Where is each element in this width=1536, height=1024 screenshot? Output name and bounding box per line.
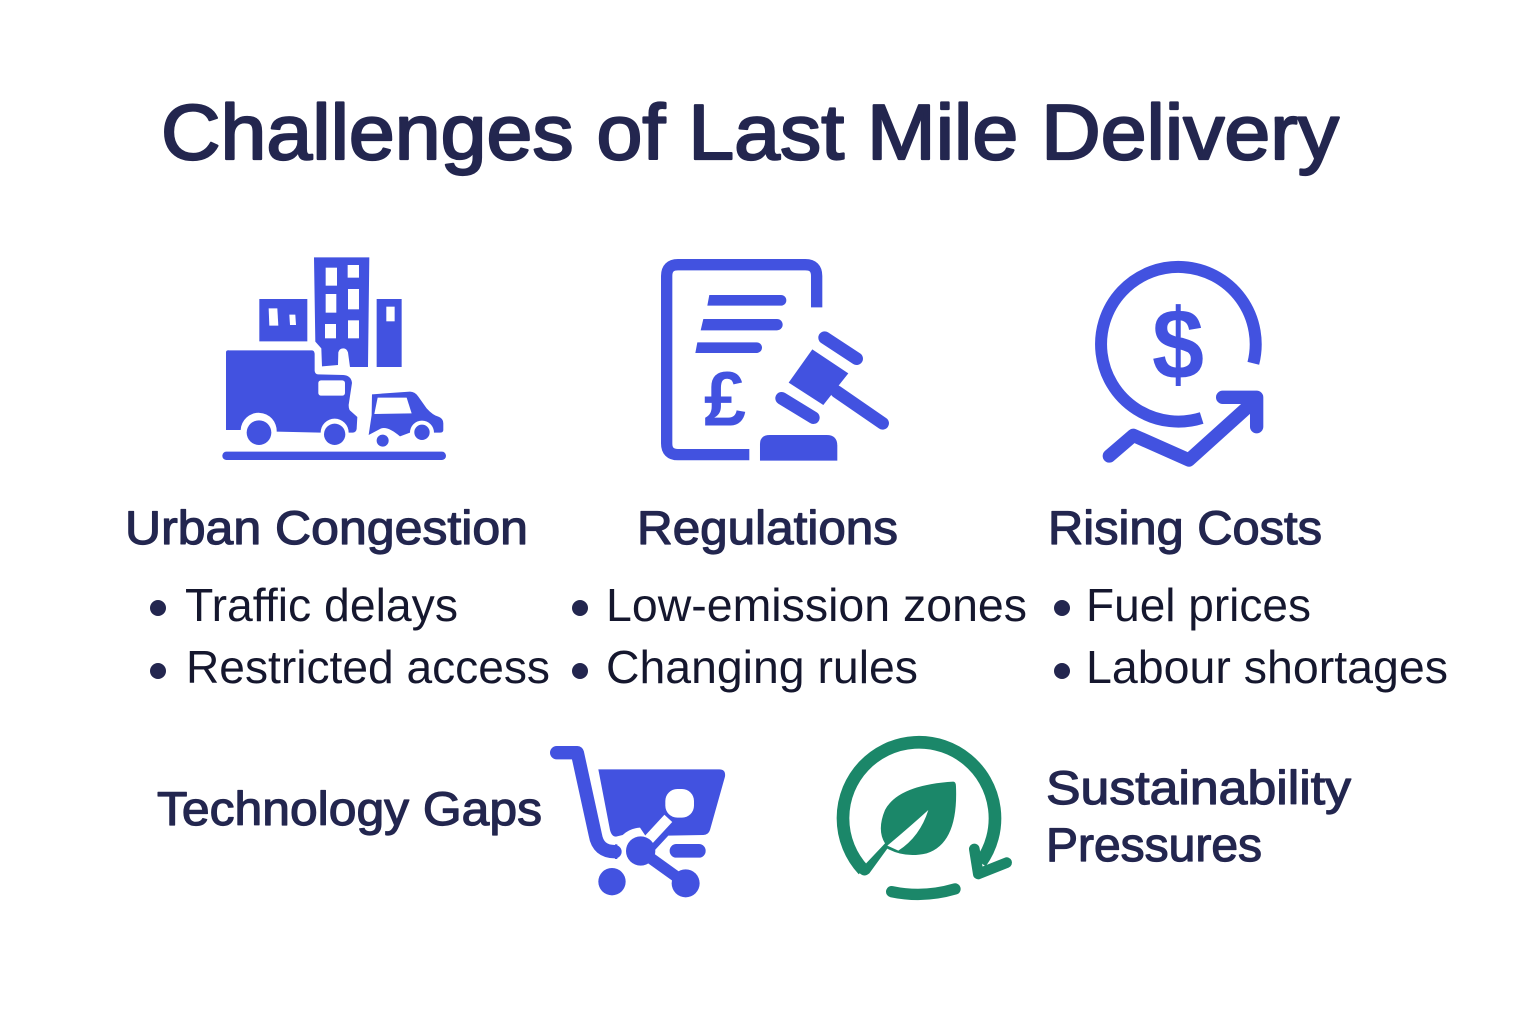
icon: document with pound sign and gavel: £ bbox=[704, 358, 746, 443]
list: rising costs: Labour shortages bbox=[1086, 641, 1448, 693]
icon: shopping cart with network nodes bbox=[557, 753, 725, 897]
list: rising costs bbox=[1054, 579, 1448, 693]
heading: regulations: Regulations bbox=[637, 501, 898, 554]
icon: dollar coin with rising arrow: $ bbox=[1152, 288, 1204, 400]
heading: urban congestion: Urban Congestion bbox=[125, 501, 528, 554]
icon: city buildings, truck and van bbox=[222, 257, 446, 460]
icon: dollar coin with rising arrow bbox=[1101, 267, 1257, 460]
list: regulations: Changing rules bbox=[606, 641, 918, 693]
list: regulations bbox=[572, 579, 1027, 693]
list: urban congestion bbox=[150, 579, 550, 693]
panel: rising costs bbox=[1048, 267, 1448, 693]
heading: sustainability pressures: Sustainability bbox=[1046, 761, 1352, 814]
list: urban congestion: Restricted access bbox=[186, 641, 550, 693]
panel: urban congestion bbox=[125, 257, 550, 693]
heading: technology gaps: Technology Gaps bbox=[157, 782, 542, 835]
list: regulations: Low-emission zones bbox=[606, 579, 1027, 631]
list: rising costs: Fuel prices bbox=[1086, 579, 1311, 631]
list: urban congestion: Traffic delays bbox=[185, 579, 458, 631]
panel: regulations bbox=[572, 265, 1027, 693]
heading line two: sustainability pressures: Pressures bbox=[1046, 818, 1262, 871]
icon: document with pound sign and gavel bbox=[667, 265, 883, 461]
heading: rising costs: Rising Costs bbox=[1048, 501, 1322, 554]
title: Challenges of Last Mile Delivery bbox=[161, 88, 1339, 176]
panel: sustainability pressures bbox=[843, 742, 1352, 894]
panel: technology gaps bbox=[157, 753, 725, 897]
icon: leaf with circular arrow bbox=[843, 742, 1007, 894]
